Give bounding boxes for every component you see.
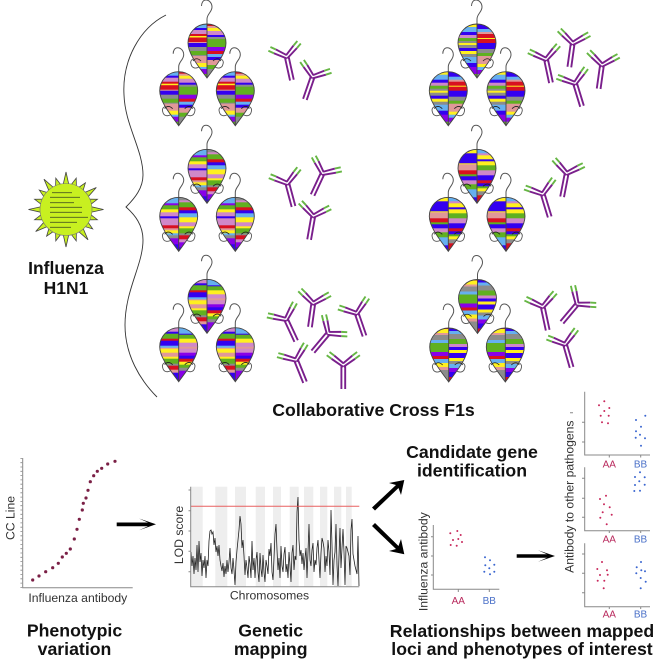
chart: other pathogen panel 1: BB	[634, 459, 647, 470]
antibodies: row 3 right	[524, 283, 598, 372]
curly brace	[124, 15, 166, 397]
antibodies: row 2 left	[268, 155, 343, 243]
chart: other pathogen panel 3	[582, 543, 650, 620]
heading: Genetic mapping: mapping	[234, 639, 308, 659]
heading: Collaborative Cross F1s: Collaborative Cross F1s	[272, 400, 475, 420]
chart: LOD score genetic mapping	[172, 487, 359, 602]
chart: influenza antibody by genotype: BB	[483, 596, 496, 607]
axis label: antibody to other pathogens: Antibody to other pathogens	[562, 420, 576, 573]
chart: other pathogen panel 3: BB	[634, 609, 647, 620]
mouse group: row 1 left	[159, 0, 255, 182]
heading: Phenotypic variation: variation	[38, 639, 111, 659]
chart: phenotypic variation dot plot: CC Line	[4, 496, 18, 540]
heading: Relationships between mapped loci and phenotypes of interest: loci and phenotypes of interest	[391, 639, 653, 659]
mouse group: row 3 left	[159, 255, 255, 433]
chart: other pathogen panel 1	[570, 392, 650, 470]
label: Influenza H1N1: Influenza	[28, 258, 104, 278]
arrow: mapping to candidate gene	[372, 480, 404, 510]
mouse group: row 3 right	[429, 256, 525, 437]
heading: Candidate gene identification: identification	[417, 461, 527, 481]
heading: Genetic mapping: Genetic	[238, 621, 303, 641]
arrow: mapping to relationships	[372, 523, 404, 554]
chart: other pathogen panel 1: AA	[603, 459, 616, 470]
antibodies: row 3 left	[265, 288, 380, 389]
heading: Relationships between mapped loci and phenotypes of interest: Relationships between mapped	[390, 621, 654, 641]
arrow: phenotype to mapping	[117, 518, 156, 530]
arrow: influenza antibody to other pathogens	[517, 550, 555, 562]
chart: phenotypic variation dot plot: Influenza antibody	[28, 591, 128, 605]
antibodies: row 2 right	[523, 157, 585, 222]
chart: other pathogen panel 2	[582, 467, 650, 546]
antibodies: row 1 right	[527, 28, 620, 111]
chart: other pathogen panel 2: BB	[634, 535, 647, 546]
antibodies: row 1 left	[268, 40, 333, 105]
chart: LOD score genetic mapping: Chromosomes	[230, 588, 309, 602]
chart: influenza antibody by genotype	[417, 511, 499, 611]
chart: other pathogen panel 2: AA	[603, 535, 616, 546]
mouse group: row 2 left	[159, 125, 255, 307]
chart: LOD score genetic mapping: LOD score	[172, 506, 186, 564]
heading: Candidate gene identification: Candidate gene	[406, 442, 538, 462]
mouse group: row 1 right	[428, 0, 526, 182]
heading: Phenotypic variation: Phenotypic	[27, 621, 122, 641]
mouse group: row 2 right	[428, 125, 526, 305]
chart: phenotypic variation dot plot	[4, 458, 133, 605]
icon: influenza virus	[28, 172, 104, 247]
label: Influenza H1N1: H1N1	[44, 278, 89, 298]
chart: influenza antibody by genotype: Influenza antibody	[417, 511, 431, 611]
chart: other pathogen panel 3: AA	[603, 609, 616, 620]
chart: influenza antibody by genotype: AA	[452, 596, 465, 607]
